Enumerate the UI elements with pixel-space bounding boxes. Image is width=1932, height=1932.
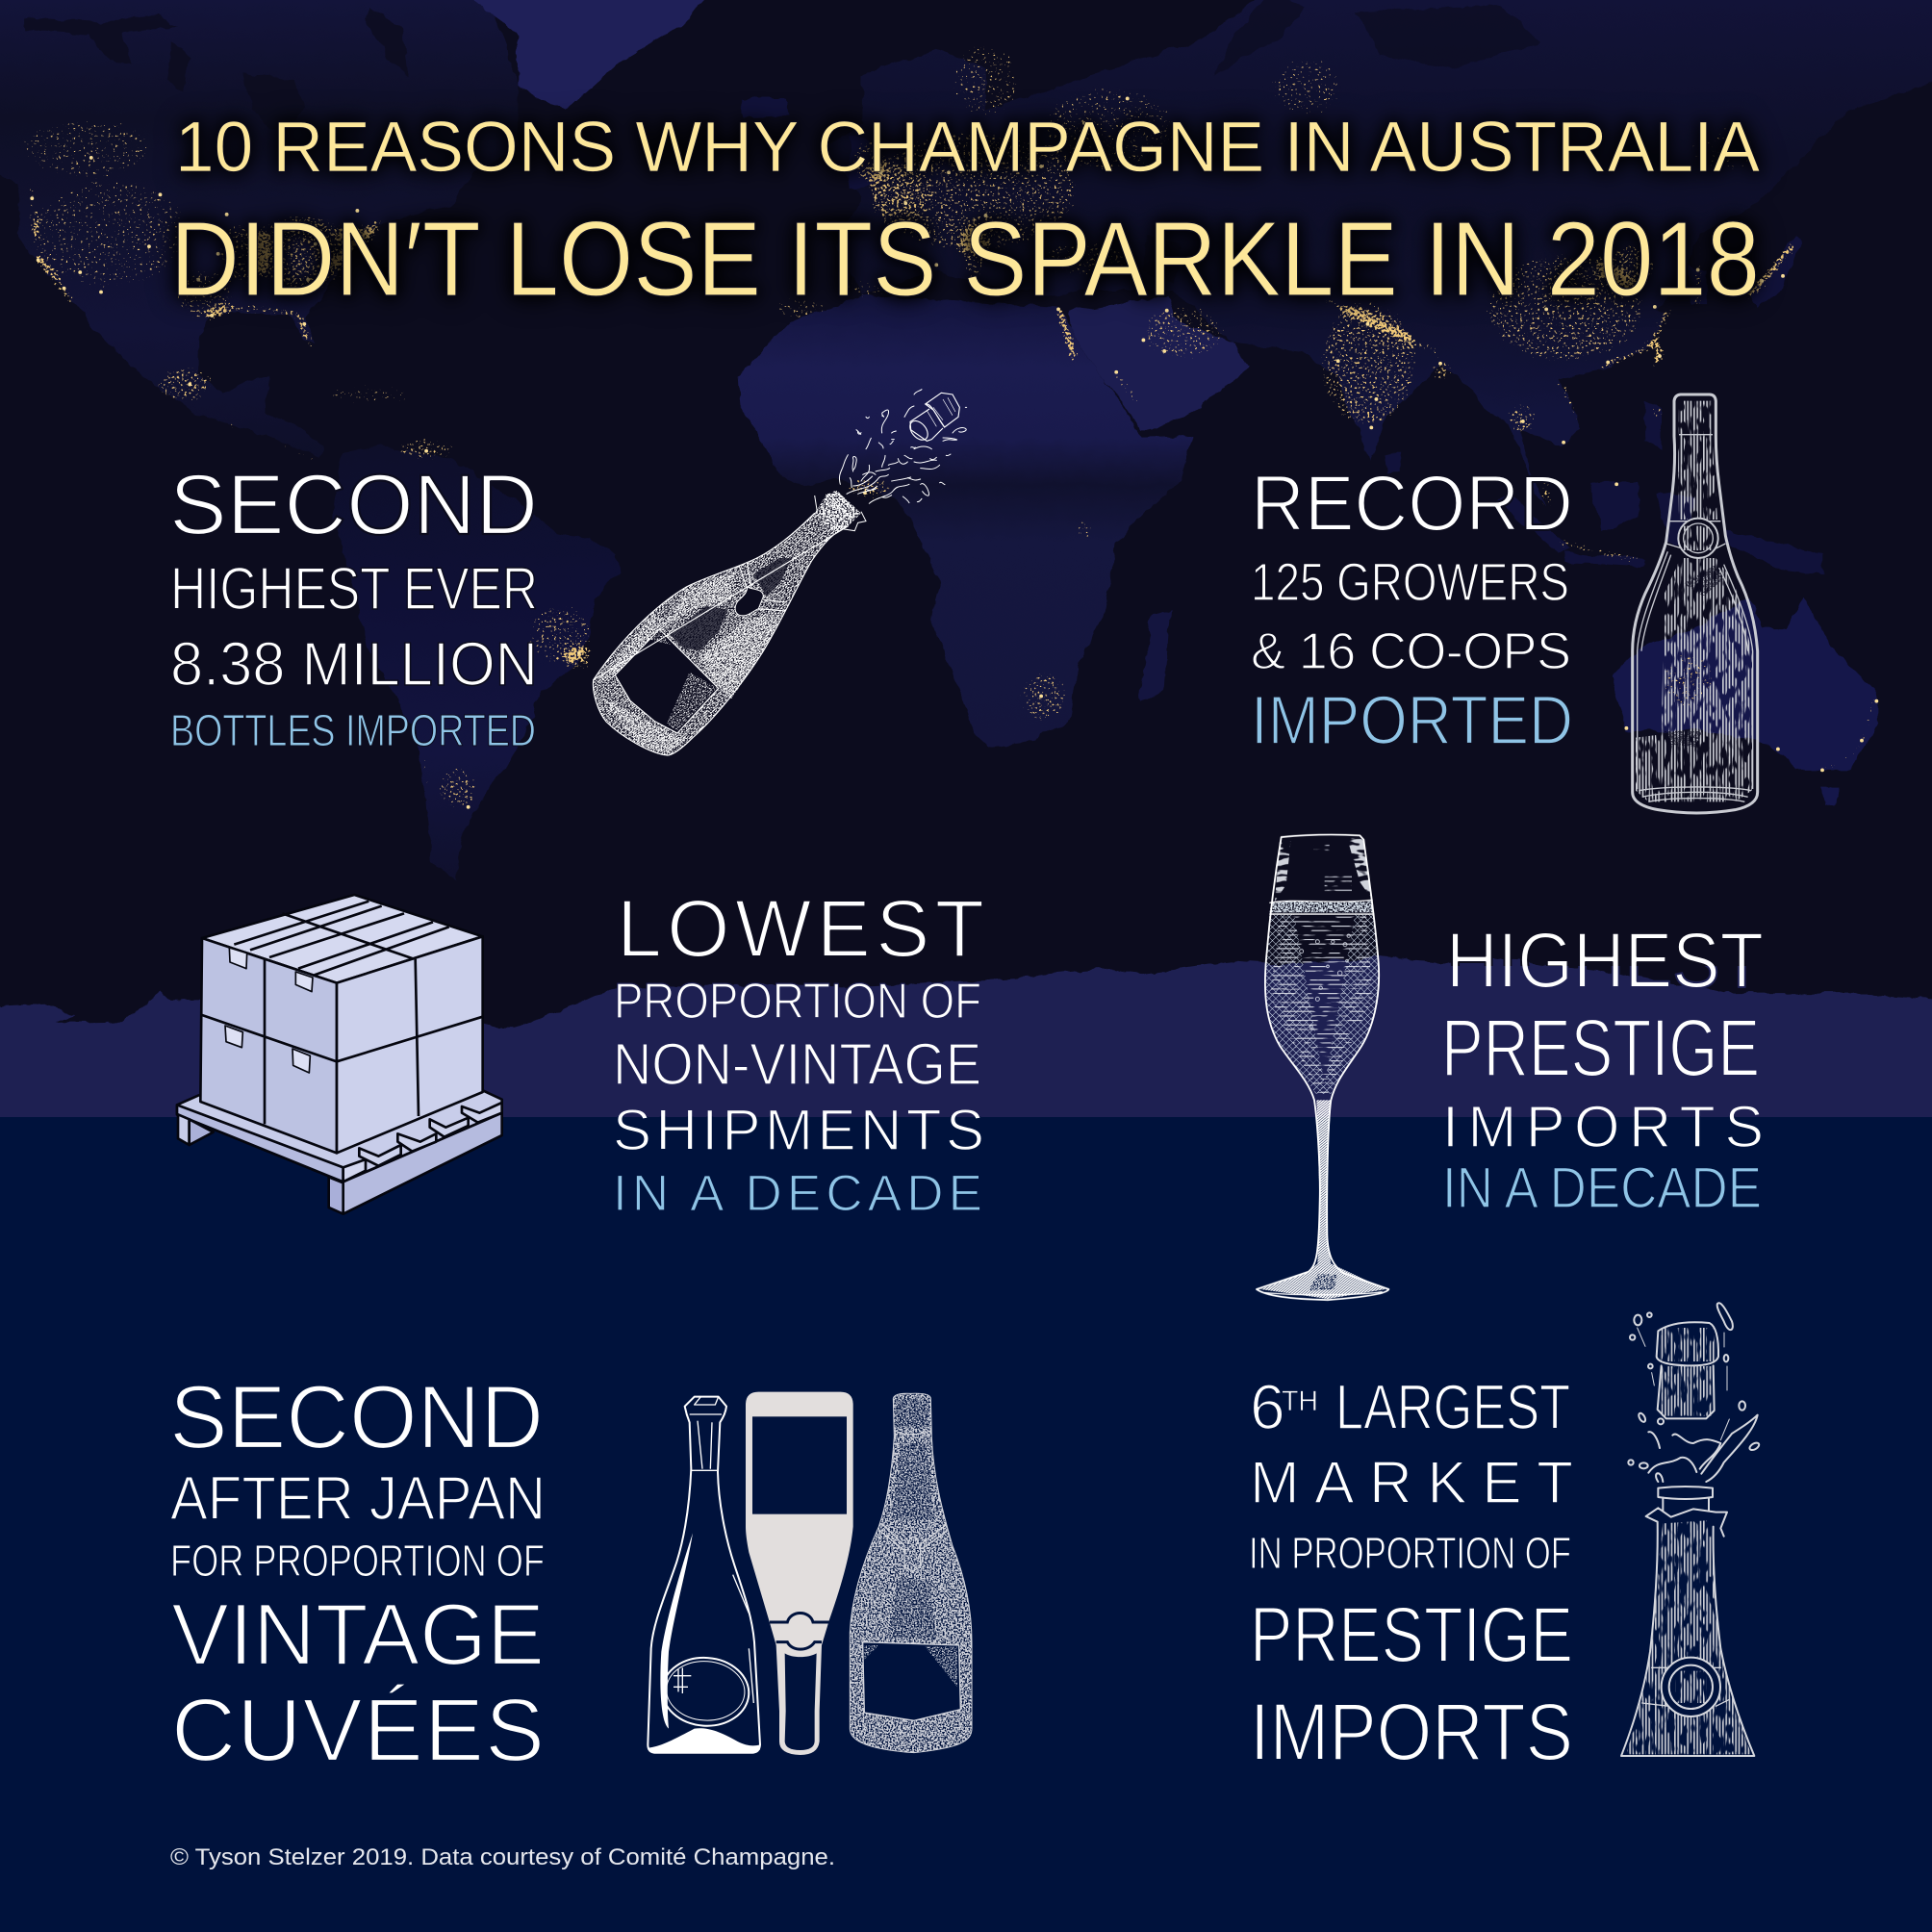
panel: second after Japan text: FOR PROPORTION OF: [170, 1536, 545, 1586]
panel: second after Japan text: VINTAGE: [171, 1587, 545, 1684]
icon: opened bottle neck and cork: [1621, 1303, 1760, 1756]
icon: tall engraved bottle: [1633, 394, 1758, 813]
bright city spots: [32, 98, 1876, 807]
panel: 6th largest market text: MARKET: [1250, 1450, 1573, 1516]
title line 1: 10 REASONS WHY CHAMPAGNE IN AUSTRALIA: [175, 107, 1761, 187]
panel: second highest ever text: BOTTLES IMPORTED: [170, 705, 536, 755]
middle bottle, upside-down: [746, 1392, 853, 1755]
icon: three vintage bottles: [648, 1392, 972, 1755]
panel: record growers text: RECORD: [1251, 460, 1573, 547]
icon: flying cork: [906, 393, 959, 444]
icon: champagne bottle popping: [593, 390, 967, 755]
panel: second after Japan text: [169, 1366, 546, 1780]
panel: lowest proportion text: NON-VINTAGE: [613, 1031, 981, 1097]
panel: second after Japan text: CUVÉES: [171, 1680, 545, 1780]
pallet: [177, 1090, 502, 1214]
panel: highest prestige text: IN A DECADE: [1442, 1156, 1762, 1220]
icon: pallet of boxes: [177, 895, 502, 1214]
panel: highest prestige text: HIGHEST: [1446, 917, 1764, 1004]
city lights: [18, 43, 1876, 813]
title: [170, 107, 1761, 318]
panel: highest prestige text: IMPORTS: [1442, 1094, 1764, 1159]
Antarctica band: [0, 956, 1932, 1146]
panel: 6th largest market text: [1249, 1371, 1573, 1777]
panel: second highest ever text: SECOND: [169, 456, 538, 552]
panel: lowest proportion text: LOWEST: [617, 883, 984, 974]
panel: 6th largest market text: 6: [1250, 1371, 1285, 1442]
right bottle: [850, 1393, 972, 1753]
icon: champagne spray: [839, 390, 967, 503]
panel: 6th largest market text: LARGEST: [1335, 1371, 1570, 1442]
panel: lowest proportion text: SHIPMENTS: [613, 1098, 984, 1162]
panel: lowest proportion text: PROPORTION OF: [614, 974, 981, 1030]
panel: second highest ever text: 8.38 MILLION: [170, 629, 538, 699]
left bottle: [648, 1397, 760, 1754]
panel: record growers text: [1251, 460, 1573, 759]
panel: lowest proportion text: [613, 883, 984, 1222]
panel: second after Japan text: AFTER JAPAN: [170, 1463, 546, 1533]
panel: 6th largest market text: TH: [1282, 1385, 1318, 1417]
footer credit: © Tyson Stelzer 2019. Data courtesy of Comité Champagne.: [170, 1844, 835, 1870]
panel: highest prestige text: [1441, 917, 1764, 1220]
background: world map at night: [0, 0, 1932, 1146]
panel: record growers text: & 16 CO-OPS: [1251, 623, 1571, 680]
title line 2: DIDN′T LOSE ITS SPARKLE IN 2018: [170, 200, 1760, 318]
panel: 6th largest market text: PRESTIGE: [1250, 1591, 1573, 1679]
icon: champagne flute: [1257, 834, 1388, 1300]
panel: second highest ever text: [169, 456, 538, 755]
panel: second highest ever text: HIGHEST EVER: [170, 556, 538, 623]
boxes: [202, 895, 483, 983]
panel: second after Japan text: SECOND: [169, 1366, 544, 1467]
panel: record growers text: 125 GROWERS: [1251, 551, 1569, 612]
panel: 6th largest market text: IN PROPORTION OF: [1249, 1528, 1571, 1578]
panel: highest prestige text: PRESTIGE: [1441, 1003, 1760, 1093]
panel: 6th largest market text: IMPORTS: [1250, 1687, 1573, 1777]
panel: lowest proportion text: IN A DECADE: [613, 1165, 982, 1222]
background: ocean band at the bottom: [0, 1117, 1932, 1932]
panel: record growers text: IMPORTED: [1251, 683, 1573, 759]
